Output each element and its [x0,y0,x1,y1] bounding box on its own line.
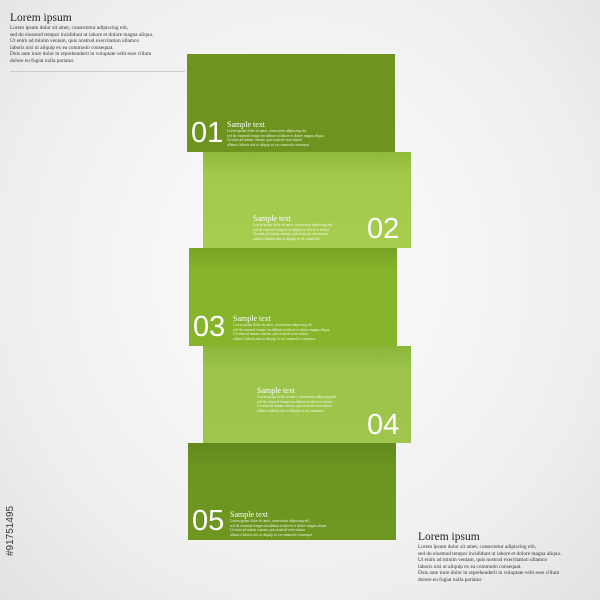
text 05: Lorem ipsum dolor sit amet, consectetur adipiscing elit, [230,519,310,523]
text 01: sed do eiusmod tempor incididunt ut labore et dolore magna aliqua. [227,134,324,138]
text 04: sed do eiusmod tempor incididunt ut labore et dolore [257,400,333,404]
panel: step 04 [203,346,411,443]
text 05: sed do eiusmod tempor incididunt ut labore et dolore magna aliqua. [230,524,327,528]
number 05: 05 [192,505,224,537]
panel: step 05 [188,443,396,540]
text 04 [257,386,337,413]
text block: top-left: laboris nisi ut aliquip ex ea commodo consequat. [10,45,114,51]
panel: step 04: ullamco laboris nisi ut aliquip ex ea commodo [257,408,324,412]
text block: bottom-right: Duis aute irure dolor in reprehenderit in voluptate velit esse cillum [418,570,559,576]
text 04: Lorem ipsum dolor sit amet, consectetur adipiscing elit, [257,395,337,399]
number 04: 04 [367,409,399,441]
text 04: Sample text [257,386,295,395]
panel: step 02: ullamco laboris nisi ut aliquip ex ea commodo [253,236,320,240]
text 03: sed do eiusmod tempor incididunt ut labore et dolore magna aliqua. [233,328,330,332]
text 01: ullamco laboris nisi ut aliquip ex ea commodo consequat. [227,142,310,146]
text block: top-left: dolore eu fugiat nulla pariatur. [10,58,74,64]
text block: bottom-right [418,531,561,583]
number 01: 01 [191,117,223,149]
text block: bottom-right: dolore eu fugiat nulla pariatur. [418,577,482,583]
number 02: 02 [367,213,399,245]
text block: top-left [10,12,185,72]
text block: top-left: Duis aute irure dolor in reprehenderit in voluptate velit esse cillum [10,51,151,57]
text 03: ullamco laboris nisi ut aliquip ex ea commodo consequat. [233,336,316,340]
text block: top-left: sed do eiusmod tempor incididunt ut labore et dolore magna aliqua. [10,32,153,38]
text 03: Lorem ipsum dolor sit amet, consectetur adipiscing elit, [233,323,313,327]
text 01 [227,120,324,147]
text block: bottom-right: Lorem ipsum dolor sit amet, consectetur adipiscing elit, [418,544,536,550]
text 01: Ut enim ad minim veniam, quis nostrud exercitation [227,138,302,142]
text 03: Ut enim ad minim veniam, quis nostrud exercitation [233,332,308,336]
text 02: Lorem ipsum dolor sit amet, consectetur adipiscing elit, [253,223,333,227]
number 03: 03 [193,311,225,343]
text block: top-left: Ut enim ad minim veniam, quis nostrud exercitation ullamco [10,38,139,44]
text 02: sed do eiusmod tempor incididunt ut labore et dolore [253,228,329,232]
text 01: Lorem ipsum dolor sit amet, consectetur adipiscing elit, [227,129,307,133]
stock id: #91751495 [5,506,16,556]
text block: bottom-right: sed do eiusmod tempor incididunt ut labore et dolore magna aliqua. [418,551,561,557]
text block: bottom-right: laboris nisi ut aliquip ex ea commodo consequat. [418,564,522,570]
text 05: ullamco laboris nisi ut aliquip ex ea commodo consequat. [230,532,313,536]
text 05: Sample text [230,510,268,519]
panel: step 02 [203,152,411,248]
text 03: Sample text [233,314,271,323]
text 05 [230,510,327,537]
text block: top-left: Lorem ipsum [10,12,72,24]
text 03 [233,314,330,341]
panel: step 01 [187,54,395,152]
text 02: Ut enim ad minim veniam, quis nostrud exercitation [253,232,328,236]
text 02 [253,214,333,241]
text block: bottom-right: Lorem ipsum [418,531,480,543]
text 05: Ut enim ad minim veniam, quis nostrud exercitation [230,528,305,532]
text block: top-left: Lorem ipsum dolor sit amet, consectetur adipiscing elit, [10,25,128,31]
text block: bottom-right: Ut enim ad minim veniam, quis nostrud exercitation ullamco [418,557,547,563]
text 01: Sample text [227,120,265,129]
text 04: Ut enim ad minim veniam, quis nostrud exercitation [257,404,332,408]
panel: step 03 [189,248,397,346]
text 02: Sample text [253,214,291,223]
